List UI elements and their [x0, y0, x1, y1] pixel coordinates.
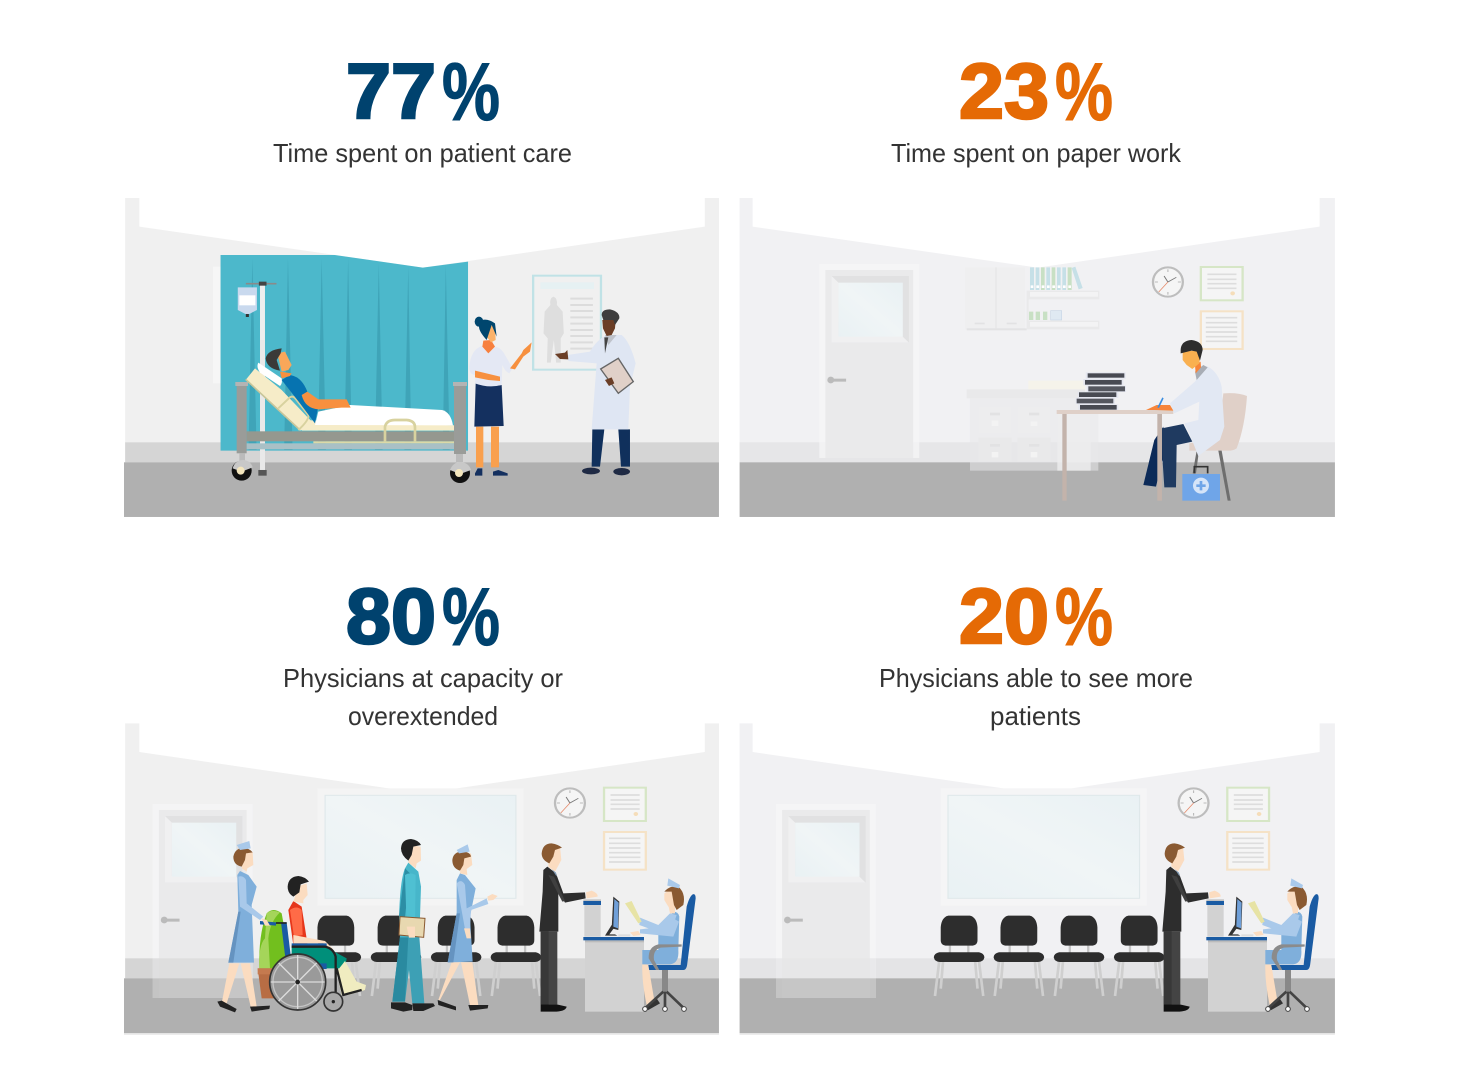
doctor writing at desk [1057, 340, 1247, 501]
framed certificates [1227, 788, 1269, 870]
room walls and floor [740, 198, 1335, 517]
anatomy wall poster [533, 276, 601, 370]
statistic: 23%: % [1055, 47, 1113, 138]
caption: physicians able to see more patients: patients [990, 701, 1081, 731]
statistic: 20% [959, 572, 1113, 663]
caption: time spent on patient care: Time spent on patient care [273, 138, 572, 168]
patient and wheelchair [270, 876, 366, 1011]
reception desk with man and nurse [1162, 843, 1319, 1012]
room walls and floor [740, 723, 1335, 1035]
statistic: 77%: 77 [346, 47, 436, 135]
desk [1057, 410, 1173, 501]
upper cabinet and shelves [965, 267, 1099, 330]
stack of books [1076, 372, 1126, 410]
caption: physicians at capacity or overextended: Physicians at capacity or [283, 663, 563, 693]
nurse and doctor talking [469, 309, 636, 476]
faded door [819, 264, 919, 458]
reception desk with man and nurse [539, 843, 696, 1012]
man in teal and second nurse in queue [391, 839, 498, 1012]
medical bag [1182, 467, 1220, 501]
chair [1189, 393, 1247, 501]
doctor [555, 309, 636, 475]
panel: time on patient care [124, 47, 719, 517]
wall clock [1179, 788, 1209, 818]
lower cabinet and drawers [967, 381, 1098, 471]
large window [941, 788, 1147, 906]
row of waiting chairs [311, 916, 541, 996]
room with door, window and chairs [124, 723, 719, 1035]
statistic: 20%: % [1055, 572, 1113, 663]
statistic: 23%: 23 [959, 47, 1049, 135]
room with door, window and chairs [740, 723, 1335, 1035]
man in teal suit with folder [391, 839, 435, 1012]
room, curtain and wall poster [124, 198, 719, 517]
statistic: 77% [346, 47, 500, 138]
statistic: 77%: % [442, 47, 500, 138]
faded cabinets and shelves [965, 267, 1099, 471]
nurse [469, 317, 532, 476]
caption: physicians at capacity or overextended: overextended [348, 701, 498, 731]
right bed end and wheel [450, 382, 471, 483]
room with faded door, clock and certificates [740, 198, 1335, 517]
statistic: 80%: 80 [346, 572, 436, 660]
wall clock [1153, 267, 1183, 297]
teal privacy curtain [221, 255, 468, 451]
doctor [1143, 340, 1224, 501]
caption: physicians able to see more patients: Physicians able to see more [879, 663, 1193, 693]
framed certificates [1201, 267, 1243, 349]
door [153, 804, 253, 998]
caption: time spent on paper work: Time spent on paper work [891, 138, 1182, 168]
panel: physicians at capacity [124, 572, 719, 1035]
caption: physicians at capacity or overextended [283, 663, 563, 731]
potted plant [258, 910, 290, 998]
room walls and floor [124, 723, 719, 1035]
nurse pushing patient in wheelchair [217, 841, 366, 1012]
wall clock [555, 788, 585, 818]
panel: physicians able to see more patients [740, 572, 1335, 1035]
hospital bed with patient [232, 340, 457, 481]
statistic: 23% [959, 47, 1113, 138]
statistic: 80% [346, 572, 500, 663]
scene: office with doctor writing [740, 198, 1335, 517]
statistic: 80%: % [442, 572, 500, 663]
door [776, 804, 876, 998]
large window [317, 788, 524, 906]
second nurse walking [438, 844, 498, 1011]
panel: time on paper work [740, 47, 1335, 517]
scene: crowded waiting room [124, 723, 719, 1035]
IV bag and hook [238, 282, 276, 342]
scene: quiet waiting room [740, 723, 1335, 1035]
nurse [217, 841, 276, 1012]
scene: hospital ward with patient and doctor [124, 198, 719, 517]
row of waiting chairs [934, 916, 1164, 996]
room walls and floor [124, 198, 719, 517]
caption: physicians able to see more patients [879, 663, 1193, 731]
statistic: 20%: 20 [959, 572, 1049, 660]
framed certificates [604, 788, 646, 870]
